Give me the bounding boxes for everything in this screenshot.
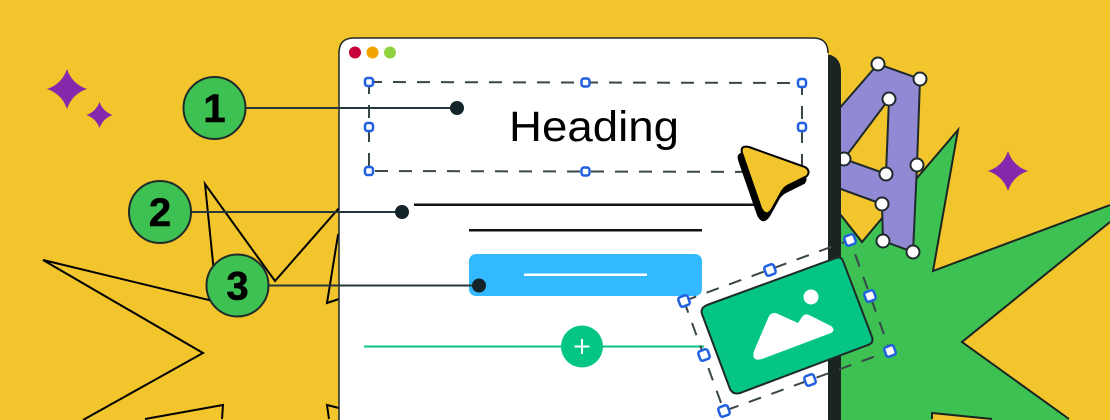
sparkle large left	[47, 69, 87, 109]
image handles	[678, 234, 896, 417]
callout 1 connector	[245, 101, 464, 115]
letter A handles	[838, 58, 926, 258]
add button	[561, 326, 603, 368]
image selection box	[678, 234, 896, 417]
callout 2: 2	[149, 191, 171, 235]
callout 2 connector	[191, 205, 409, 219]
left burst outline	[43, 184, 339, 420]
callout 2	[129, 181, 191, 243]
green insert line	[364, 346, 704, 348]
callout 3	[206, 254, 268, 316]
browser window	[339, 38, 828, 420]
image card	[702, 257, 872, 394]
text line two	[469, 229, 702, 232]
callout 3: 3	[226, 264, 249, 308]
sparkle small left	[86, 102, 112, 128]
window control dots	[349, 46, 396, 58]
callout 3 connector	[268, 278, 486, 292]
mountain icon	[753, 313, 834, 360]
right green burst	[840, 130, 1110, 420]
heading text: Heading	[509, 103, 679, 151]
sun icon	[804, 290, 818, 304]
selection handles	[365, 78, 806, 176]
callout 1	[184, 77, 246, 139]
window shadow	[700, 54, 841, 420]
heading selection box	[365, 78, 806, 176]
blue button	[469, 254, 702, 296]
sparkle right	[988, 151, 1028, 191]
cursor arrow	[739, 147, 809, 220]
purple letter A	[838, 58, 926, 258]
text line one	[414, 204, 759, 206]
callout 1: 1	[203, 87, 226, 131]
